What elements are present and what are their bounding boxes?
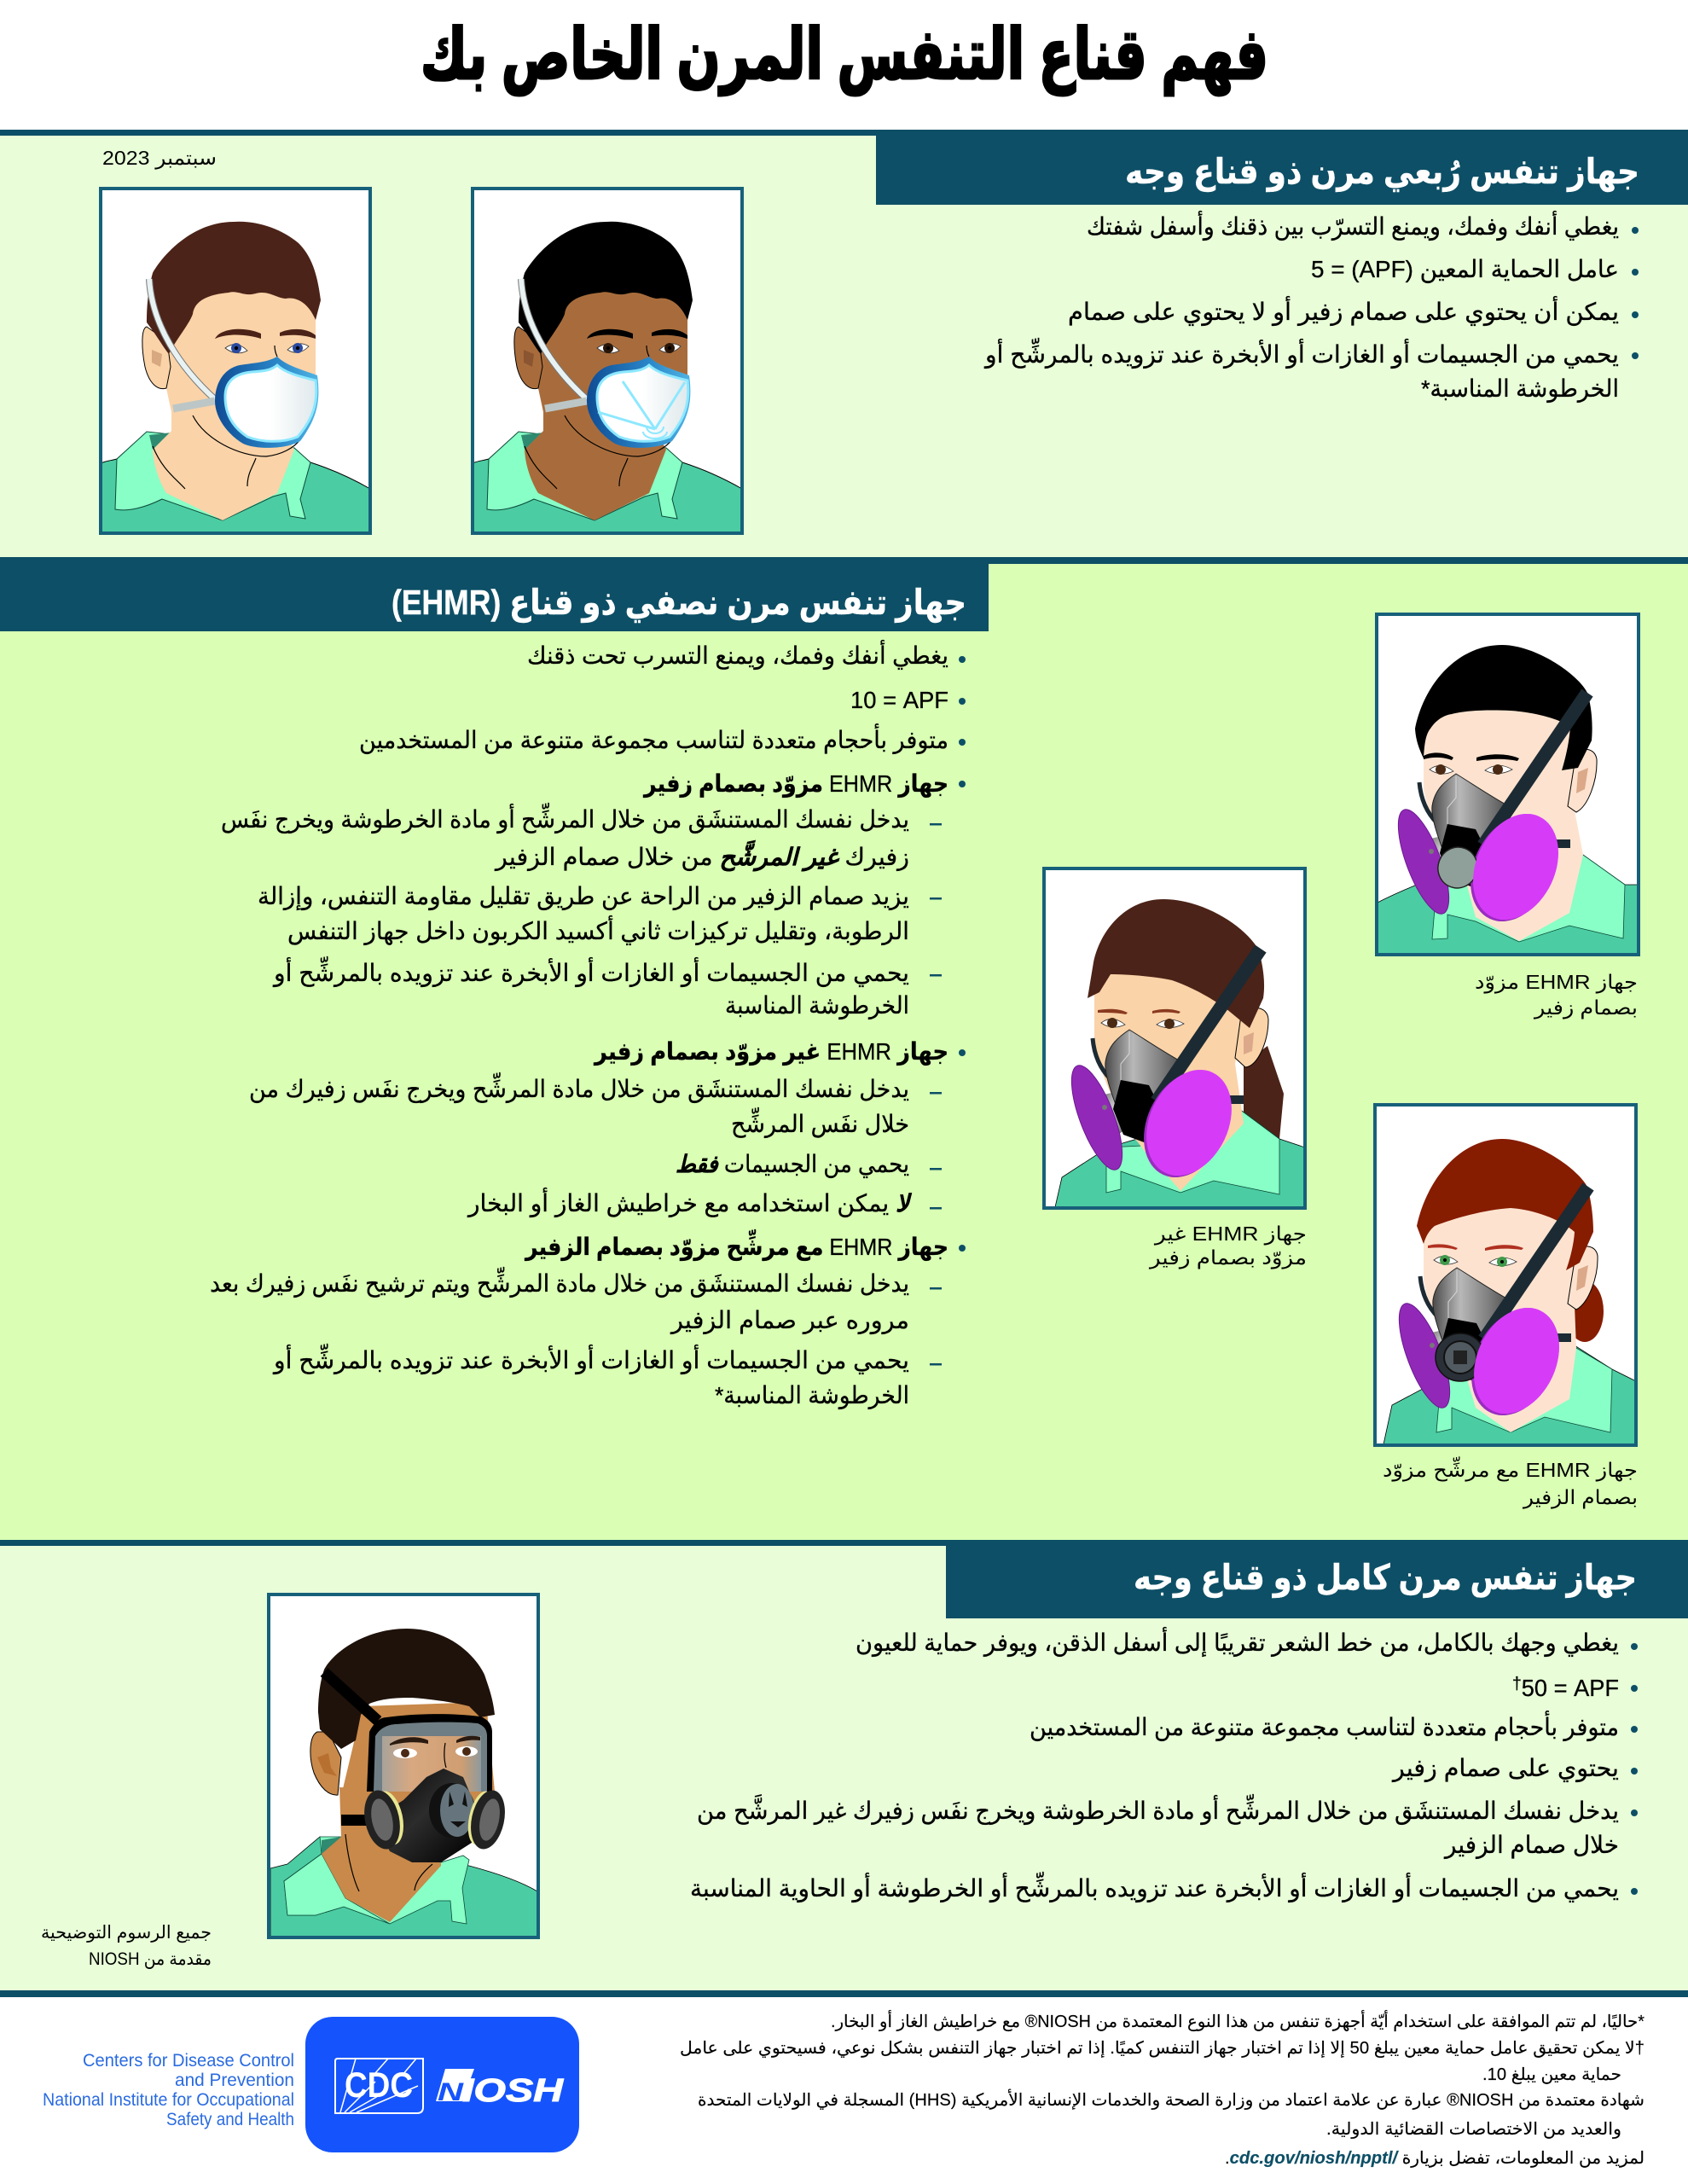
footnotes: *حاليًا، لم تتم الموافقة على استخدام أيّة أجهزة تنفس من هذا النوع المعتمدة من NIOSH® مع خراطيش الغاز أو البخار. [831,2010,1644,2031]
bullet list: full facepiece: خلال صمام الزفير [1443,1832,1619,1859]
bullet: EHMR with exhalation valve: الرطوبة، وتقليل تركيزات ثاني أكسيد الكربون داخل جهاز التنفس [287,915,909,945]
footnotes: †لا يمكن تحقيق عامل حماية معين يبلغ 50 إلا إذا تم اختبار جهاز التنفس كميًا. إذا تم اختبار جهاز التنفس بشكل نوعي، فسيحتوي على عامل [680,2039,1644,2059]
bullet list: quarter mask [983,210,1639,403]
bullet list: EHMR general: متوفر بأحجام متعددة لتناسب مجموعة متنوعة من المستخدمين [359,723,948,754]
bullet list: quarter mask: يحمي من الجسيمات أو الغازات أو الأبخرة عند تزويده بالمرشِّح أو [983,337,1619,369]
logo: CDC NIOSH: CDC [345,2065,413,2105]
agency names: National Institute for Occupational [43,2090,294,2110]
bullet: EHMR without exhalation valve: يحمي من الجسيمات فقط [676,1151,909,1178]
bullet: EHMR with filtered exhalation valve: مروره عبر صمام الزفير [670,1307,909,1334]
panel: quarter mask respirator [0,130,1688,557]
bullet list: full facepiece: متوفر بأحجام متعددة لتناسب مجموعة متنوعة من المستخدمين [1030,1710,1619,1741]
caption: EHMR with filtered exhalation valve [1383,1456,1638,1509]
bullet list: full facepiece: يغطي وجهك بالكامل، من خط الشعر تقريبًا إلى أسفل الذقن، ويوفر حماية للعيون [856,1626,1619,1657]
heading: EHMR: جهاز تنفس مرن نصفي ذو قناع (EHMR) [392,583,966,624]
bullet: EHMR with filtered exhalation valve: جهاز EHMR مع مرشِّح مزوّد بصمام الزفير [524,1229,948,1261]
heading: EHMR [0,557,989,631]
agency names: Safety and Health [166,2110,294,2129]
credit note: مقدمة من NIOSH [89,1949,212,1969]
heading: full facepiece [946,1540,1688,1618]
bullet list: quarter mask: عامل الحماية المعين (APF)‏ = 5 [1311,256,1619,283]
illustration: man with quarter mask, light skin [101,189,370,533]
caption: EHMR without exhalation valve: مزوّد بصمام زفير [1149,1246,1307,1269]
bullet: EHMR without exhalation valve: لا يمكن استخدامه مع خراطيش الغاز أو البخار [467,1187,913,1217]
bullet: EHMR with filtered exhalation valve: يحمي من الجسيمات أو الغازات أو الأبخرة عند تزويده بالمرشِّح أو [272,1343,909,1374]
bullet: EHMR without exhalation valve [249,1038,966,1217]
credit note: جميع الرسوم التوضيحية [41,1923,212,1943]
bullet list: quarter mask: يمكن أن يحتوي على صمام زفير أو لا يحتوي على صمام [1068,295,1619,326]
bullet: EHMR without exhalation valve: يدخل نفسك المستنشَق من خلال مادة المرشِّح ويخرج نفَس زفيرك من [249,1072,909,1104]
caption: EHMR with filtered exhalation valve: بصمام الزفير [1523,1486,1638,1509]
bullet list: full facepiece: † [1512,1675,1522,1693]
logo: CDC NIOSH: IOSH [462,2073,565,2109]
bullet list: EHMR general: يغطي أنفك وفمك، ويمنع التسرب تحت ذقنك [527,639,948,670]
date: سبتمبر 2023 [102,147,217,170]
agency names: and Prevention [175,2071,294,2090]
footnotes [680,2010,1644,2168]
caption: EHMR with exhalation valve: جهاز EHMR مزوّد [1475,971,1638,994]
caption: EHMR with exhalation valve [1475,971,1638,1019]
caption: EHMR with exhalation valve: بصمام زفير [1534,996,1638,1019]
illustration: man with quarter mask, dark skin [473,189,742,533]
bullet: EHMR with exhalation valve [221,770,948,1019]
bullet: EHMR with filtered exhalation valve: يدخل نفسك المستنشَق من خلال مادة المرشِّح ويتم ترشيح نفَس زفيرك بعد [210,1266,909,1298]
bullet: EHMR with exhalation valve: يزيد صمام الزفير من الراحة عن طريق تقليل مقاومة التنفس، وإزالة [258,883,909,910]
illustration: EHMR without exhalation valve [1044,868,1305,1208]
credit note [41,1923,212,1969]
caption: EHMR without exhalation valve: جهاز EHMR غير [1154,1223,1307,1246]
title: فهم قناع التنفس المرن الخاص بك [421,16,1268,96]
bullet list: quarter mask: الخرطوشة المناسبة* [1421,375,1619,403]
caption: EHMR without exhalation valve [1149,1223,1307,1269]
bullet list: full facepiece: يدخل نفسك المستنشَق من خلال المرشِّح أو مادة الخرطوشة ويخرج نفَس زفيرك غير المرشَّح من [697,1793,1619,1826]
bullet: EHMR with exhalation valve: زفيرك غير المرشَّح من خلال صمام الزفير [494,839,909,872]
illustration: EHMR with filtered exhalation valve [1375,1105,1636,1445]
footnotes: شهادة معتمدة من NIOSH® عبارة عن علامة اعتماد من وزارة الصحة والخدمات الإنسانية الأمريكية (HHS) المسجلة في الولايات المتحدة [698,2089,1644,2111]
bullet list: full facepiece: يحمي من الجسيمات أو الغازات أو الأبخرة عند تزويده بالمرشِّح أو الخرطوشة أو الحاوية المناسبة [690,1871,1619,1902]
bullet: EHMR with exhalation valve: الخرطوشة المناسبة [725,992,909,1019]
footnotes: لمزيد من المعلومات، تفضل بزيارة cdc.gov/niosh/npptl/‎. [1225,2149,1644,2168]
bullet list: EHMR general: APF‏ = 10 [850,687,948,713]
agency names: Centers for Disease Control [83,2051,294,2071]
illustration: man with full facepiece respirator [269,1594,538,1937]
bullet list: full facepiece: يحتوي على صمام زفير [1391,1755,1619,1782]
illustration: EHMR with exhalation valve [1377,614,1639,955]
footnotes: والعديد من الاختصاصات القضائية الدولية. [1326,2120,1621,2139]
caption: EHMR with filtered exhalation valve: جهاز EHMR مع مرشِّح مزوّد [1383,1456,1638,1482]
panel: half mask respirator EHMR [0,557,1688,1540]
agency names [43,2051,294,2129]
bullet: EHMR with filtered exhalation valve [210,1229,966,1409]
bullet: EHMR with exhalation valve: يدخل نفسك المستنشَق من خلال المرشِّح أو مادة الخرطوشة ويخرج نفَس [221,802,909,834]
logo: CDC NIOSH: N [438,2078,465,2106]
bullet: EHMR with filtered exhalation valve: الخرطوشة المناسبة* [715,1382,909,1409]
panel: full facepiece respirator [0,1540,1688,1990]
logo: CDC NIOSH [305,2017,579,2152]
footnotes: حماية معين يبلغ 10. [1482,2065,1621,2084]
bullet: EHMR with exhalation valve: يحمي من الجسيمات أو الغازات أو الأبخرة عند تزويده بالمرشِّح أو [272,956,909,987]
bullet: EHMR with exhalation valve: جهاز EHMR مزوّد بصمام زفير [642,770,948,798]
bullet: EHMR without exhalation valve: جهاز EHMR غير مزوّد بصمام زفير [593,1038,948,1066]
bullet list: quarter mask: يغطي أنفك وفمك، ويمنع التسرّب بين ذقنك وأسفل شفتك [1087,210,1619,241]
bullet list: full facepiece [690,1626,1638,1902]
bullet: EHMR without exhalation valve: خلال نفَس المرشِّح [731,1107,909,1138]
bullet list: full facepiece: APF‏ = 50 [1522,1675,1621,1701]
bullet list: EHMR general [359,639,966,787]
footer [0,1990,1688,2168]
heading: quarter mask [876,130,1688,205]
